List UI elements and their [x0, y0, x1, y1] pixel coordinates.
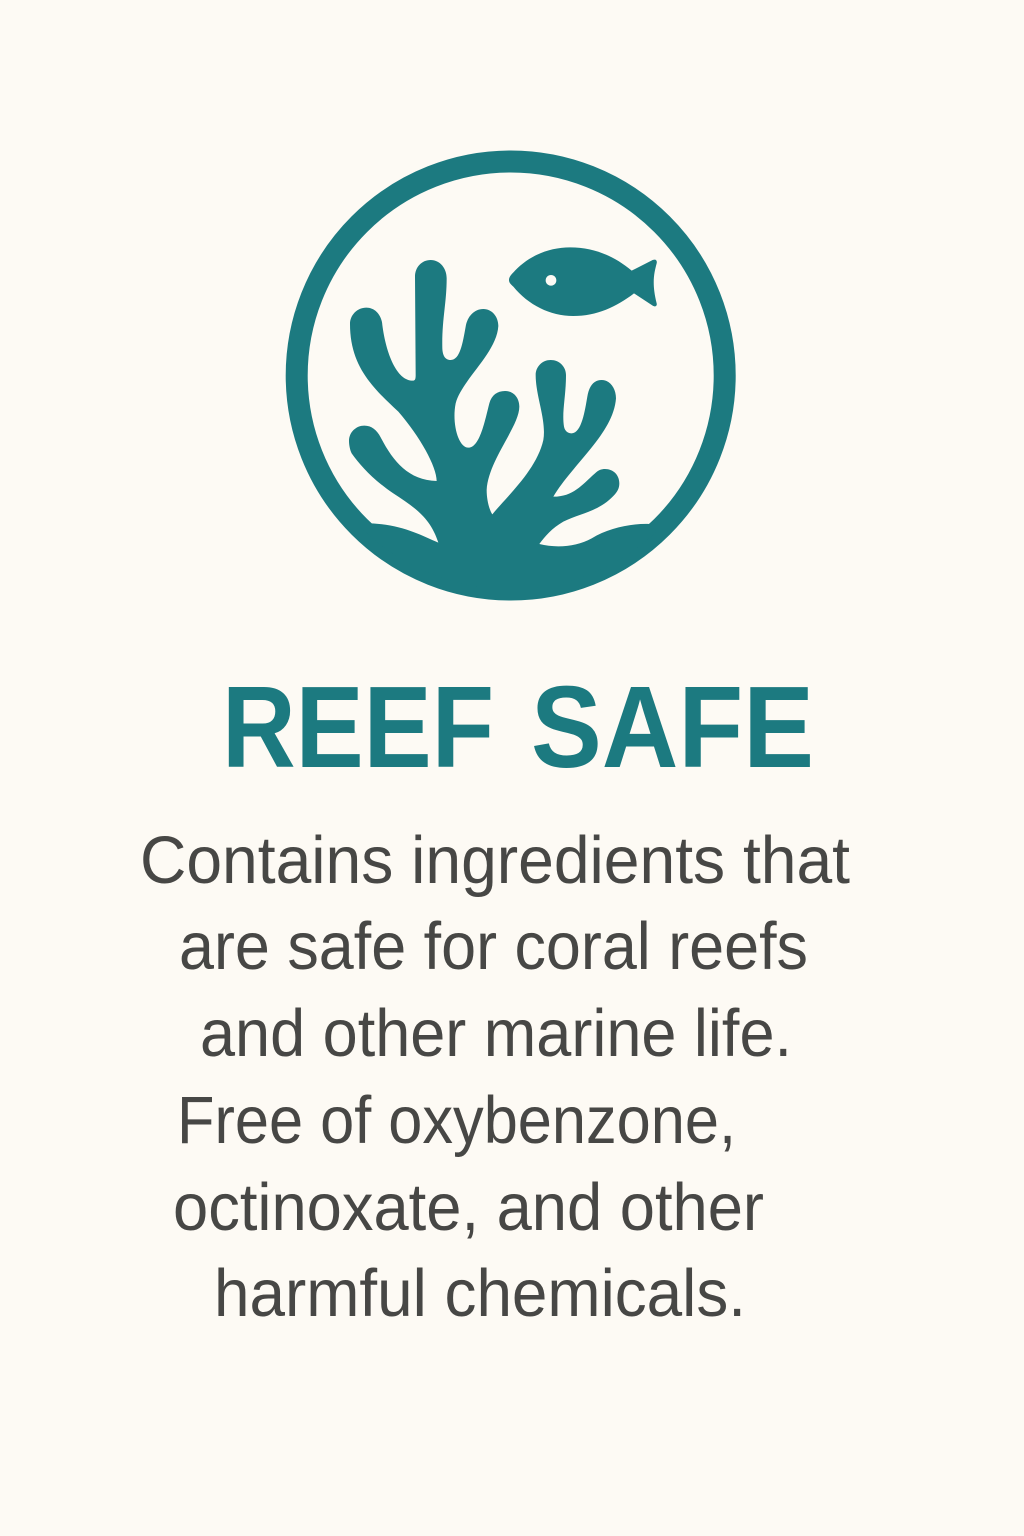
- text block: description: harmful chemicals.: [214, 1256, 746, 1331]
- text block: description: [140, 823, 850, 1331]
- text block: description: octinoxate, and other: [173, 1170, 764, 1245]
- icon: fish: [509, 247, 657, 316]
- text block: description: are safe for coral reefs: [179, 909, 808, 984]
- heading: REEF SAFE: SAFE: [531, 662, 814, 792]
- text block: description: Contains ingredients that: [140, 823, 850, 898]
- text block: description: Free of oxybenzone,: [177, 1083, 736, 1158]
- heading: REEF SAFE: [222, 662, 814, 792]
- icon: coral and seabed: [349, 260, 657, 589]
- icon: circular ring: [297, 162, 725, 590]
- heading: REEF SAFE: REEF: [222, 662, 494, 792]
- icon: reef safe badge: [297, 162, 725, 590]
- text block: description: and other marine life.: [200, 996, 792, 1071]
